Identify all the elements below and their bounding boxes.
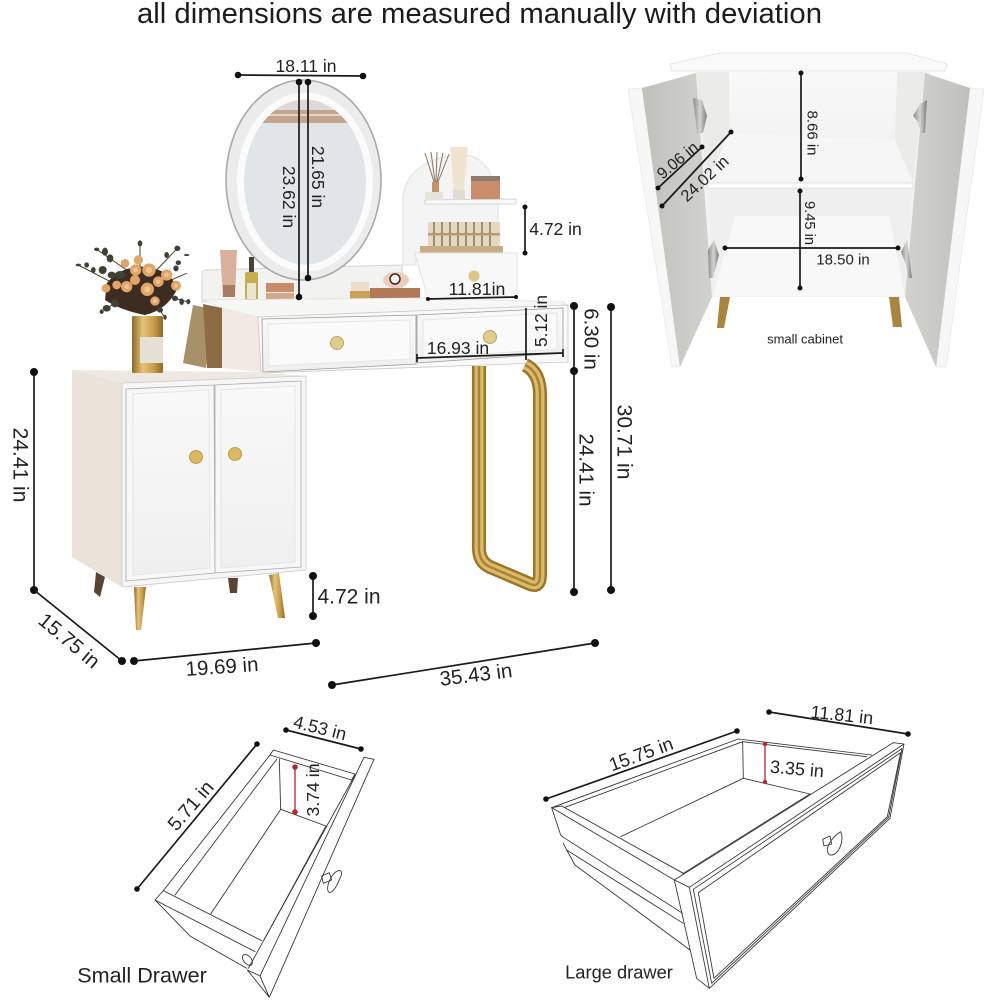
dim: width 19.69 in	[130, 639, 320, 681]
desk backsplash	[202, 265, 402, 302]
right door	[901, 73, 984, 367]
cabinet interior	[696, 72, 930, 297]
left door	[628, 73, 719, 367]
dim: mirror width 18.11 in	[235, 56, 366, 79]
caption: large drawer: Large drawer	[565, 962, 673, 982]
dim: large drawer 15.75 in	[543, 728, 740, 802]
books	[183, 304, 222, 368]
illustration: vanity desk with cabinet	[72, 80, 568, 630]
dim: cabinet 9.45 in	[798, 188, 817, 290]
cabinet	[72, 370, 306, 630]
dim: large drawer 15.75 in: 15.75 in	[606, 733, 676, 775]
dim: cabinet 8.66 in	[798, 70, 820, 182]
dim: drawer 16.93 in	[417, 338, 563, 362]
dim: depth 15.75 in	[34, 590, 126, 673]
desk surface items	[220, 250, 420, 305]
cabinet doors	[126, 381, 301, 581]
gold vase	[132, 316, 163, 373]
dim: width 35.43 in: 35.43 in	[438, 659, 514, 691]
dim: small drawer 4.53 in: 4.53 in	[291, 712, 349, 744]
caption: small cabinet: small cabinet	[767, 332, 843, 346]
large drawer knob	[823, 832, 842, 855]
cabinet legs	[94, 572, 285, 630]
dim: cabinet height 24.41 in	[8, 368, 38, 594]
dim: drawer 5.12 in	[526, 295, 551, 360]
caption: small drawer: Small Drawer	[77, 962, 207, 988]
dim: cabinet 24.02 in	[660, 130, 734, 208]
cabinet top board	[670, 53, 947, 71]
dim: tower 11.81 in: 11.81in	[449, 279, 505, 299]
dim: small drawer 5.71 in: 5.71 in	[163, 777, 219, 835]
dim: desk leg 24.41 in	[570, 371, 598, 596]
small drawer line drawing	[155, 750, 374, 997]
large drawer depth 3.35 in	[763, 742, 825, 784]
small drawer depth 3.74 in	[292, 763, 323, 817]
dim: cabinet 18.50 in: 18.50 in	[816, 252, 870, 268]
dim: mirror 23.62 in: 23.62 in	[279, 166, 299, 228]
dim: cabinet 24.02 in: 24.02 in	[677, 152, 733, 206]
dim: cabinet 18.50 in	[722, 246, 900, 268]
dim: cabinet 9.06 in: 9.06 in	[654, 139, 702, 183]
dim: cabinet 9.45 in: 9.45 in	[801, 201, 817, 245]
dim: large drawer 11.81 in: 11.81 in	[810, 702, 874, 728]
dim: tower 4.72 in	[522, 204, 582, 256]
dim: drawer 5.12 in: 5.12 in	[531, 295, 551, 347]
tower organizer	[403, 147, 517, 299]
dim: mirror 21.65 in	[305, 79, 328, 281]
large drawer depth 3.35 in: 3.35 in	[769, 757, 825, 781]
dim: width 35.43 in	[328, 639, 599, 691]
dim: mirror 23.62 in	[279, 79, 302, 300]
dim: total height 30.71 in	[607, 303, 636, 594]
dim: small drawer 5.71 in	[134, 741, 260, 892]
dim: desk apron 6.30 in: 6.30 in	[580, 308, 602, 370]
dim: total height 30.71 in: 30.71 in	[612, 405, 636, 479]
desk body and drawers	[203, 298, 568, 373]
dim: width 19.69 in: 19.69 in	[185, 653, 259, 681]
small drawer knob	[243, 871, 342, 965]
dim: small drawer 4.53 in	[283, 712, 364, 752]
dim: desk apron 6.30 in	[570, 302, 602, 375]
dim: cabinet height 24.41 in: 24.41 in	[8, 428, 32, 502]
dim: cabinet 8.66 in: 8.66 in	[804, 110, 820, 156]
dim: drawer 16.93 in: 16.93 in	[427, 338, 489, 358]
dim: mirror 21.65 in: 21.65 in	[308, 146, 328, 208]
large drawer line drawing	[552, 739, 904, 988]
dim: tower 4.72 in: 4.72 in	[529, 219, 582, 239]
dim: tower 11.81 in	[426, 279, 518, 301]
flower bouquet	[76, 240, 190, 320]
small drawer depth 3.74 in: 3.74 in	[303, 763, 323, 817]
dim: desk leg 24.41 in: 24.41 in	[574, 434, 598, 506]
dim: leg 4.72 in: 4.72 in	[317, 586, 381, 608]
dim: depth 15.75 in: 15.75 in	[34, 609, 104, 673]
dim: mirror width 18.11 in: 18.11 in	[276, 56, 336, 76]
small cabinet photo	[628, 53, 984, 367]
dim: leg 4.72 in	[309, 572, 381, 620]
dim: large drawer 11.81 in	[766, 702, 911, 737]
mirror	[226, 80, 381, 280]
gold desk leg	[479, 365, 540, 585]
cabinet legs	[717, 297, 902, 328]
